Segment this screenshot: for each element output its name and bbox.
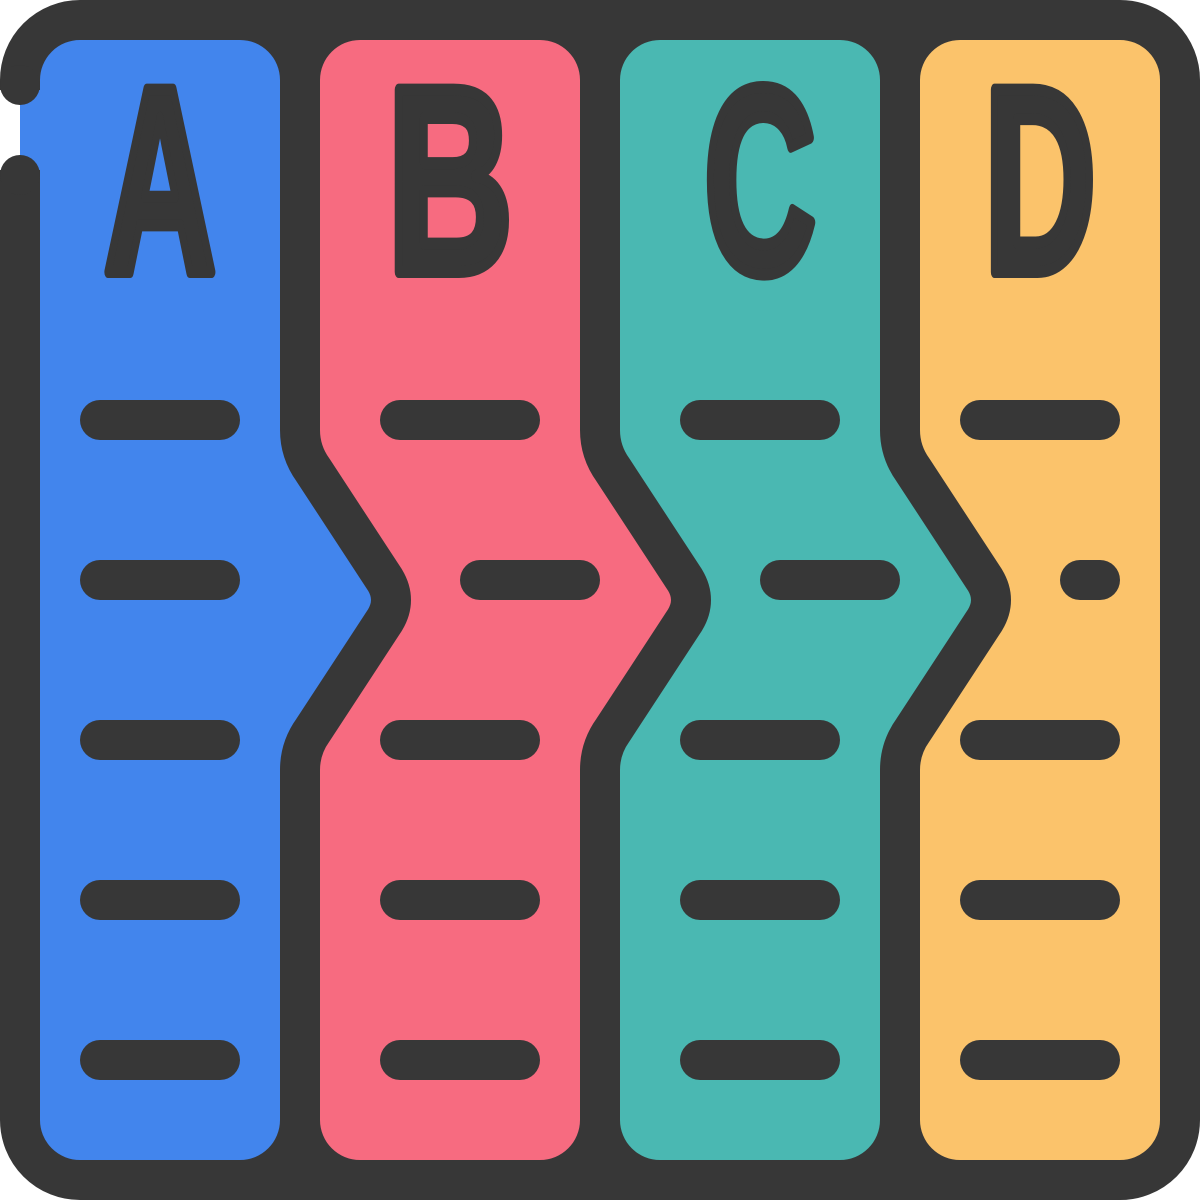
letters: C xyxy=(704,33,816,329)
column corner fillets xyxy=(240,40,960,1160)
letters: B xyxy=(387,33,513,329)
letters: D xyxy=(984,33,1096,329)
letters xyxy=(104,33,1096,329)
column C fill xyxy=(620,40,971,1160)
column B fill xyxy=(320,40,671,1160)
frame gap xyxy=(0,65,40,195)
letters: A xyxy=(104,33,216,329)
dashes xyxy=(100,420,1100,1060)
column D fill xyxy=(920,40,1160,1160)
column A fill xyxy=(40,40,371,1160)
